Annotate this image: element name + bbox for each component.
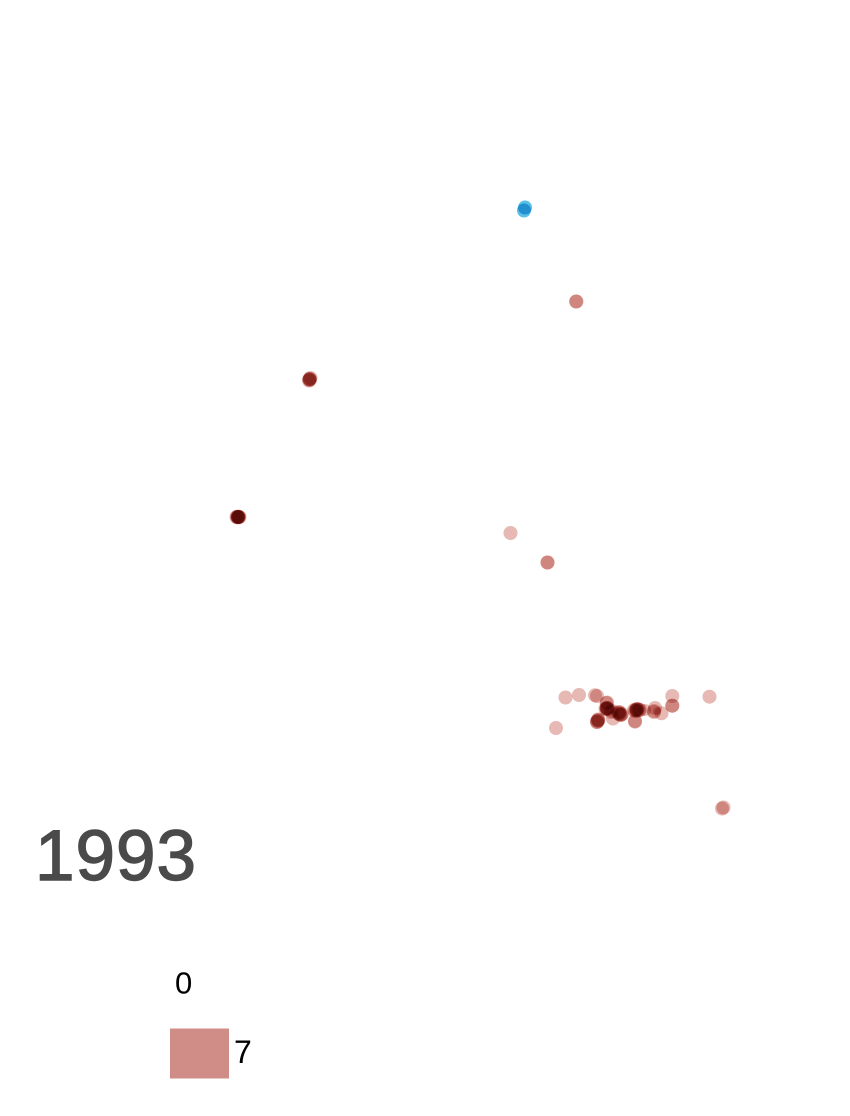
legend <box>170 966 252 1078</box>
map dots: red events <box>230 294 730 816</box>
map dots: southern cluster <box>549 688 716 735</box>
map dots: blue cluster <box>517 200 532 218</box>
legend label: 0: 0 <box>175 966 192 1000</box>
legend label: 7: 7 <box>234 1034 252 1070</box>
legend swatch <box>170 1028 229 1078</box>
year title: 1993 <box>35 817 197 896</box>
